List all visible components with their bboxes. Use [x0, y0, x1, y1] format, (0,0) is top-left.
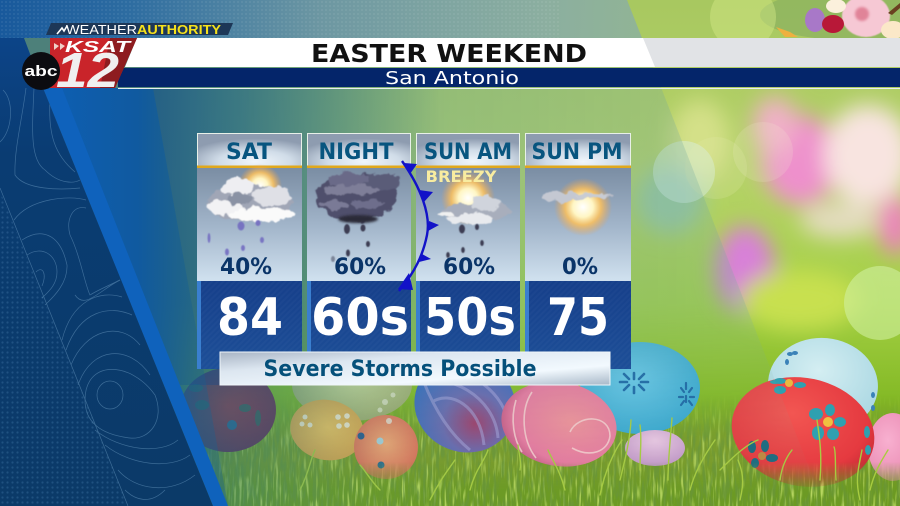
partly cloudy rain icon [208, 164, 294, 256]
light blue diagonal panel [43, 88, 228, 506]
precip chance: 60% [334, 255, 386, 280]
forecast panel: Sunday AM [416, 133, 520, 369]
egg: coral [354, 415, 418, 479]
forecast panel: Sunday PM [525, 133, 631, 369]
temperature: 50s [424, 288, 516, 348]
precip chance: 0% [562, 255, 598, 280]
contour lines [0, 88, 195, 506]
temperature [197, 281, 302, 369]
header [308, 134, 410, 166]
precip chance: 60% [443, 255, 495, 280]
forecast panel: Night [307, 133, 411, 369]
cold front symbol [398, 161, 439, 291]
header: SAT [226, 140, 272, 165]
station logo [22, 38, 137, 98]
breezy label: BREEZY [426, 167, 497, 186]
severe storms banner [220, 352, 610, 385]
egg: red with flowers [721, 364, 885, 500]
egg: pale blue [764, 333, 882, 437]
header: NIGHT [318, 140, 394, 165]
easter eggs [180, 333, 900, 500]
egg: striped [401, 343, 529, 467]
egg: orange [285, 393, 369, 467]
temperature: 75 [547, 288, 609, 348]
severe storms banner: Severe Storms Possible [264, 357, 536, 382]
back grass [208, 406, 900, 488]
title: EASTER WEEKEND [311, 39, 587, 68]
temperature [525, 281, 631, 369]
sun and rain cloud icon [435, 171, 512, 258]
egg: blue [580, 342, 700, 434]
subtitle: San Antonio [385, 69, 519, 89]
abc badge: abc [24, 63, 58, 80]
egg: dim left [180, 368, 276, 452]
thunderstorm icon [316, 172, 400, 262]
forecast panel: Saturday [197, 133, 302, 369]
egg: pink right [868, 413, 900, 481]
temperature [307, 281, 411, 369]
temperature: 84 [217, 288, 283, 348]
header: weather authority bar: WEATHER [66, 22, 137, 37]
header: SUN AM [424, 140, 512, 165]
header: title bars [118, 38, 900, 89]
header: weather authority bar: AUTHORITY [137, 22, 221, 37]
egg: olive [292, 349, 412, 421]
mostly sunny icon [543, 178, 615, 236]
grass blades [300, 418, 888, 500]
precip chance: 40% [220, 255, 272, 280]
egg: pink swirl [495, 373, 623, 475]
temperature [416, 281, 520, 369]
station logo: KSAT [65, 39, 132, 56]
flower blossom top right [776, 0, 900, 39]
egg: lilac small [625, 430, 685, 466]
front grass [228, 417, 900, 506]
header: SUN PM [532, 140, 622, 165]
station logo: 12 [56, 44, 119, 98]
left topographic panel [0, 38, 213, 506]
header: weather authority bar [46, 22, 233, 37]
header [416, 134, 520, 166]
temperature: 60s [311, 288, 409, 348]
header [198, 134, 302, 166]
